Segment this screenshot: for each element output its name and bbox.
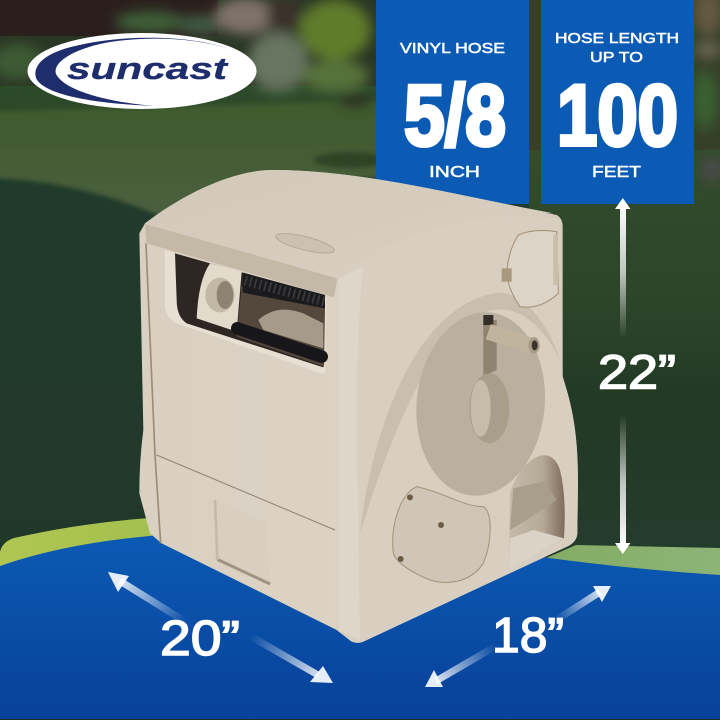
back lawn strip <box>0 80 380 115</box>
olive mown band <box>0 100 400 216</box>
drawer handle <box>215 500 270 585</box>
dimension: 22 inches: 22” <box>598 346 676 400</box>
arch ridge <box>360 293 560 533</box>
green curved band: left <box>0 518 170 575</box>
right lawn <box>529 150 720 550</box>
unit: inch: INCH <box>429 164 480 181</box>
logo: suncast <box>28 33 256 109</box>
label: up to: UP TO <box>590 50 643 66</box>
dark fence <box>0 0 218 36</box>
logo wordmark: suncast <box>67 51 229 86</box>
logo swoosh <box>35 38 230 106</box>
reel disc <box>407 306 554 502</box>
drawer seam <box>157 455 335 530</box>
dimension: 20 inches: 20” <box>160 612 240 666</box>
value: 100: 100 <box>557 68 678 164</box>
label: hose length: HOSE LENGTH <box>555 31 679 47</box>
corner ridge highlight <box>338 267 363 640</box>
lid front edge <box>145 224 337 297</box>
inner reel wall <box>237 287 325 367</box>
side panel shading <box>337 217 578 643</box>
crank handle <box>488 332 532 346</box>
door <box>502 231 558 307</box>
green curved band: right <box>530 545 720 580</box>
label: vinyl hose: VINYL HOSE <box>400 41 505 57</box>
foliage blobs <box>0 0 720 184</box>
hose coil <box>243 273 325 308</box>
black bar <box>237 328 322 357</box>
foliage backdrop <box>0 0 720 86</box>
front opening <box>165 250 327 373</box>
inner reel <box>258 310 323 348</box>
dimension arrow: width upper <box>108 572 186 622</box>
unit: feet: FEET <box>592 164 641 181</box>
lawn shadow near panel <box>314 152 386 168</box>
body <box>139 170 578 643</box>
panel: vinyl hose <box>376 0 529 204</box>
value: 5/8: 5/8 <box>404 68 506 164</box>
lid <box>145 170 553 297</box>
cutout with step <box>509 455 565 570</box>
panel: hose length <box>541 0 694 204</box>
product: hose reel <box>139 170 578 643</box>
inner hub <box>197 263 242 332</box>
dimension arrow: depth lower <box>425 646 496 687</box>
height arrow <box>615 198 630 554</box>
dimension: 18 inches: 18” <box>492 609 564 663</box>
dimension arrow: depth upper <box>556 586 611 620</box>
edge seam <box>146 243 161 543</box>
dimension arrow: width lower <box>250 636 333 683</box>
access plate <box>393 487 490 582</box>
blue floor <box>0 520 720 719</box>
lid emblem <box>274 230 336 257</box>
